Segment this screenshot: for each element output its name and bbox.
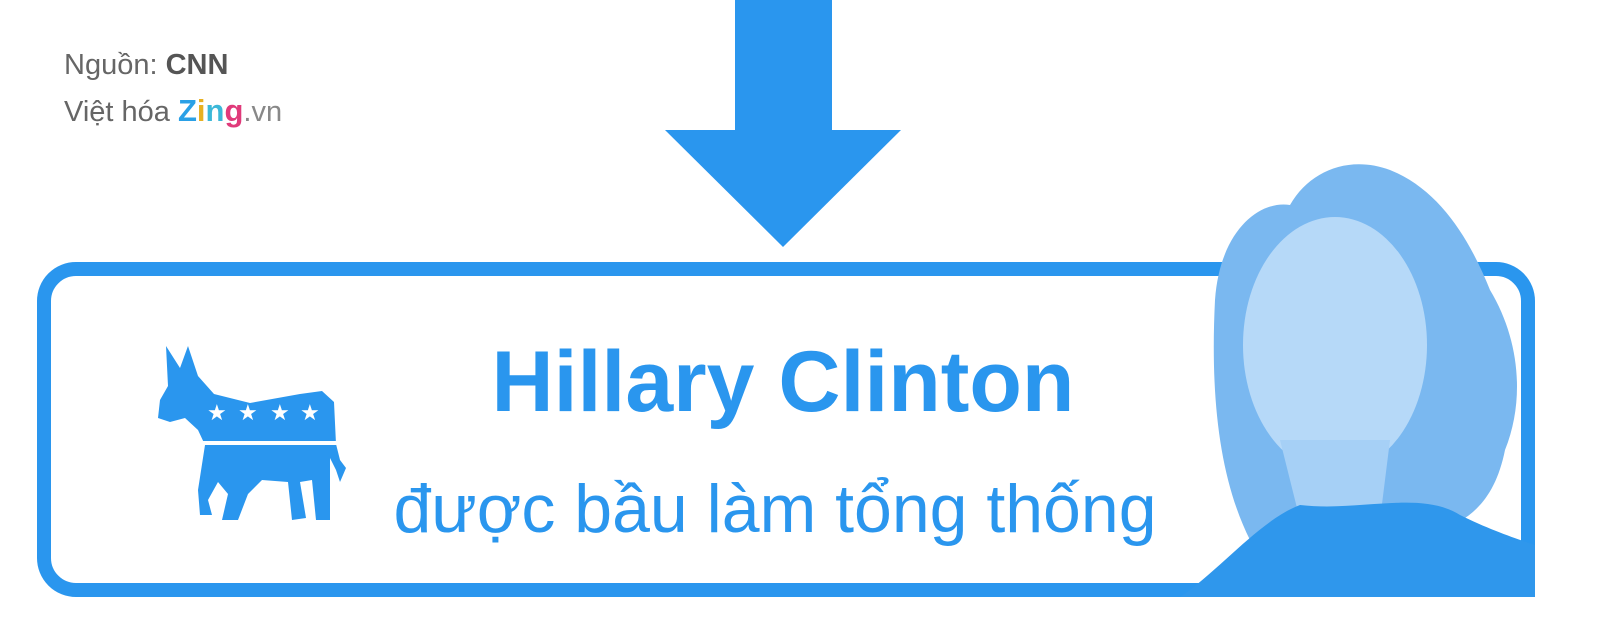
result box: [44, 269, 1528, 590]
subtitle: được bầu làm tổng thống: [393, 471, 1157, 547]
icon: democratic donkey: ★: [300, 401, 320, 426]
portrait: Hillary Clinton: [1180, 164, 1535, 597]
icon: democratic donkey: ★: [207, 401, 227, 426]
source credit: [64, 49, 282, 128]
source credit: Việt hóa Zing.vn: [64, 93, 282, 128]
icon: democratic donkey: ★: [238, 401, 258, 426]
title: Hillary Clinton: Hillary Clinton: [492, 334, 1074, 430]
icon: democratic donkey: ★: [270, 401, 290, 426]
arrow down: [665, 0, 901, 247]
source credit: Nguồn: CNN: [64, 49, 228, 81]
icon: democratic donkey: [158, 346, 346, 520]
